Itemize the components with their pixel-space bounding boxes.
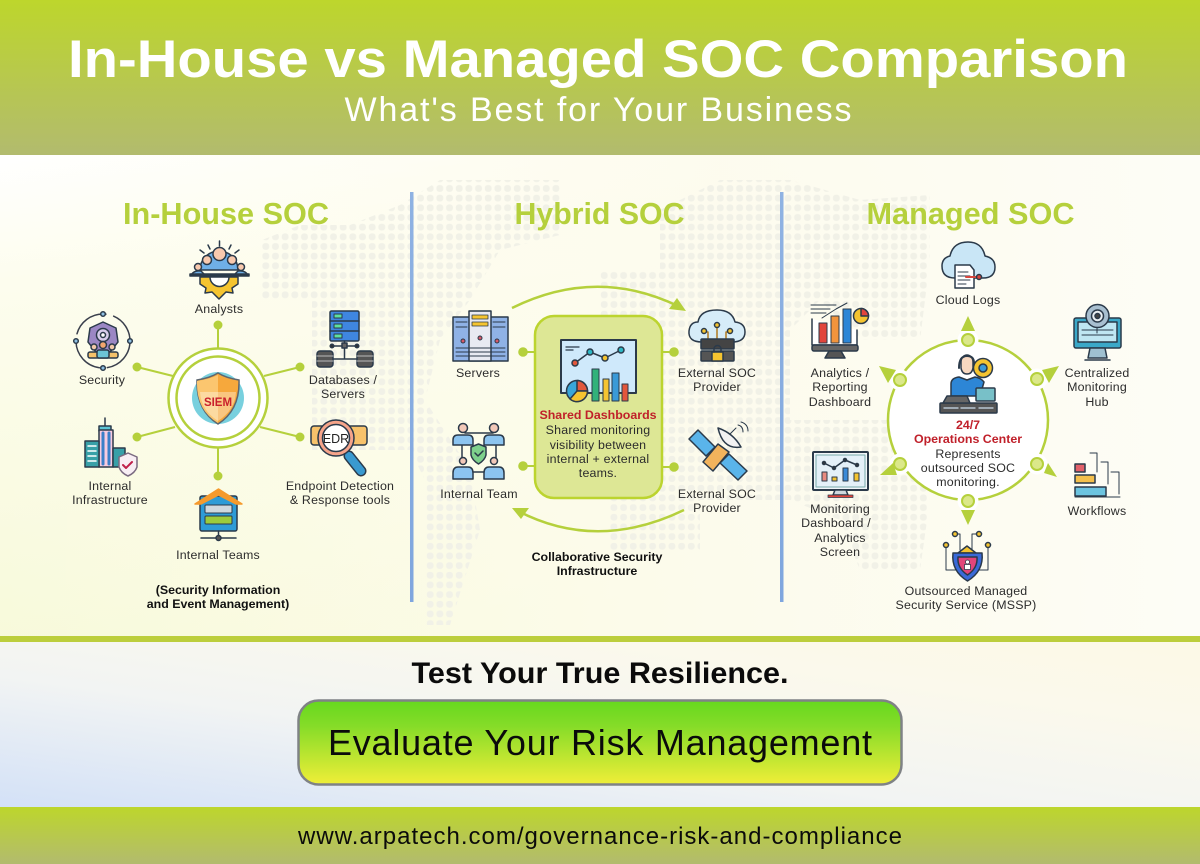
heading: 24/7 Operations Center	[914, 418, 1022, 446]
arrow: bottom flow	[512, 508, 684, 531]
label: Servers: Servers	[456, 366, 500, 380]
card: Shared Dashboards	[535, 316, 662, 498]
label: Analytics Reporting Dashboard	[809, 366, 871, 409]
icon: operator	[940, 355, 997, 413]
caption: SIEM expansion	[147, 583, 289, 611]
footer bar	[0, 807, 1200, 864]
subtitle: What's Best for Your Business	[344, 91, 852, 129]
caption: Collaborative Security Infrastructure: Collaborative Security	[532, 550, 663, 564]
CTA button	[298, 700, 902, 784]
icon: Internal Team	[453, 424, 504, 479]
description: visibility between	[550, 438, 646, 452]
description	[546, 423, 650, 480]
heading: 24/7 Operations Center: 24/7	[956, 418, 980, 432]
SIEM hub: SIEM	[204, 397, 232, 409]
icon: Centralized Monitoring Hub	[1074, 304, 1121, 360]
icon: Databases / Servers	[317, 311, 373, 367]
caption: SIEM expansion: (Security Information	[156, 583, 280, 597]
description	[921, 447, 1015, 489]
label: External SOC Provider bottom	[678, 487, 756, 515]
label: Analytics Reporting Dashboard: Reporting	[812, 380, 868, 394]
SIEM hub	[168, 348, 268, 448]
icon: Workflows	[1075, 453, 1120, 497]
icon: Cloud Logs	[942, 242, 995, 288]
label: Databases / Servers: Servers	[321, 387, 365, 401]
label: Centralized Monitoring Hub: Monitoring	[1067, 380, 1127, 394]
icon: External SOC Provider cloud	[689, 310, 745, 361]
arrow: top flow	[512, 287, 686, 311]
label: Security: Security	[79, 373, 126, 387]
green separator	[0, 636, 1200, 642]
label: Monitoring Dashboard	[801, 502, 871, 559]
caption: Collaborative Security Infrastructure	[532, 550, 663, 578]
panel: In-House SOC	[72, 196, 394, 611]
label: Internal Team: Internal Team	[440, 487, 518, 501]
label: Centralized Monitoring Hub: Centralized	[1065, 366, 1129, 380]
heading: Managed SOC: Managed SOC	[866, 196, 1074, 231]
connectors	[519, 348, 678, 471]
description: monitoring.	[936, 475, 1000, 489]
title: In-House vs Managed SOC Comparison	[68, 30, 1128, 89]
icon: Analytics Reporting Dashboard	[811, 303, 868, 358]
label: Monitoring Dashboard: Screen	[820, 545, 860, 559]
caption: Collaborative Security Infrastructure: Infrastructure	[557, 564, 637, 578]
description: teams.	[579, 466, 617, 480]
caption: SIEM expansion: and Event Management)	[147, 597, 289, 611]
icon: EDR	[311, 420, 367, 471]
spokes	[134, 322, 304, 480]
icon: EDR: EDR	[323, 432, 349, 446]
label: Cloud Logs: Cloud Logs	[936, 293, 1000, 307]
icon: Internal Teams	[195, 489, 242, 540]
description: Represents	[935, 447, 1001, 461]
label: Internal Infrastructure	[72, 479, 148, 507]
description: internal + external	[547, 452, 649, 466]
label: Analytics Reporting Dashboard: Dashboard	[809, 395, 871, 409]
icon: satellite	[689, 422, 748, 480]
description: Shared monitoring	[546, 423, 650, 437]
label: External SOC Provider top: External SOC	[678, 366, 756, 380]
CTA heading: Test Your True Resilience.	[412, 657, 788, 690]
label: EDR: Endpoint Detection	[286, 479, 394, 493]
label: Internal Infrastructure: Infrastructure	[72, 493, 148, 507]
label: EDR	[286, 479, 394, 507]
heading: Shared Dashboards: Shared Dashboards	[539, 408, 657, 422]
divider right	[780, 192, 784, 602]
label: EDR: & Response tools	[290, 493, 390, 507]
panel: call to action	[0, 642, 1200, 807]
icon: Monitoring Dashboard	[813, 452, 868, 498]
label: External SOC Provider bottom: Provider	[693, 501, 741, 515]
label: Analytics Reporting Dashboard: Analytics /	[811, 366, 870, 380]
label: Analysts: Analysts	[195, 302, 243, 316]
label: MSSP	[896, 584, 1036, 612]
description: outsourced SOC	[921, 461, 1015, 475]
label: Internal Teams: Internal Teams	[176, 548, 260, 562]
label: Monitoring Dashboard: Monitoring	[810, 502, 870, 516]
ring: Operations Center	[879, 316, 1059, 525]
icon: MSSP	[944, 532, 990, 581]
icon: Internal Infrastructure	[85, 418, 137, 476]
icon: Analysts	[190, 241, 249, 299]
label: External SOC Provider top: Provider	[693, 380, 741, 394]
label: Internal Infrastructure: Internal	[89, 479, 131, 493]
label: Centralized Monitoring Hub	[1065, 366, 1129, 409]
icon: Security	[74, 312, 132, 370]
icon: dashboard	[561, 340, 636, 402]
heading: 24/7 Operations Center: Operations Center	[914, 432, 1022, 446]
label: MSSP: Outsourced Managed	[905, 584, 1027, 598]
label: Monitoring Dashboard: Analytics	[814, 531, 866, 545]
heading: Hybrid SOC: Hybrid SOC	[514, 196, 684, 231]
icon: Servers	[453, 311, 508, 361]
label: Databases / Servers: Databases /	[309, 373, 378, 387]
label: Centralized Monitoring Hub: Hub	[1085, 395, 1109, 409]
label: External SOC Provider top	[678, 366, 756, 394]
label: Databases / Servers	[309, 373, 378, 401]
label: Workflows: Workflows	[1068, 504, 1126, 518]
footer URL: www.arpatech.com/governance-risk-and-compliance	[297, 823, 902, 850]
header banner	[0, 0, 1200, 155]
panel: Hybrid SOC	[440, 196, 756, 578]
divider left	[410, 192, 414, 602]
label: External SOC Provider bottom: External SOC	[678, 487, 756, 501]
heading: In-House SOC: In-House SOC	[123, 196, 329, 231]
label: MSSP: Security Service (MSSP)	[896, 598, 1036, 612]
panel: Managed SOC	[801, 196, 1129, 612]
comparison panel background	[0, 155, 1200, 636]
CTA button: Evaluate Your Risk Management	[328, 722, 872, 763]
label: Monitoring Dashboard: Dashboard /	[801, 516, 871, 530]
